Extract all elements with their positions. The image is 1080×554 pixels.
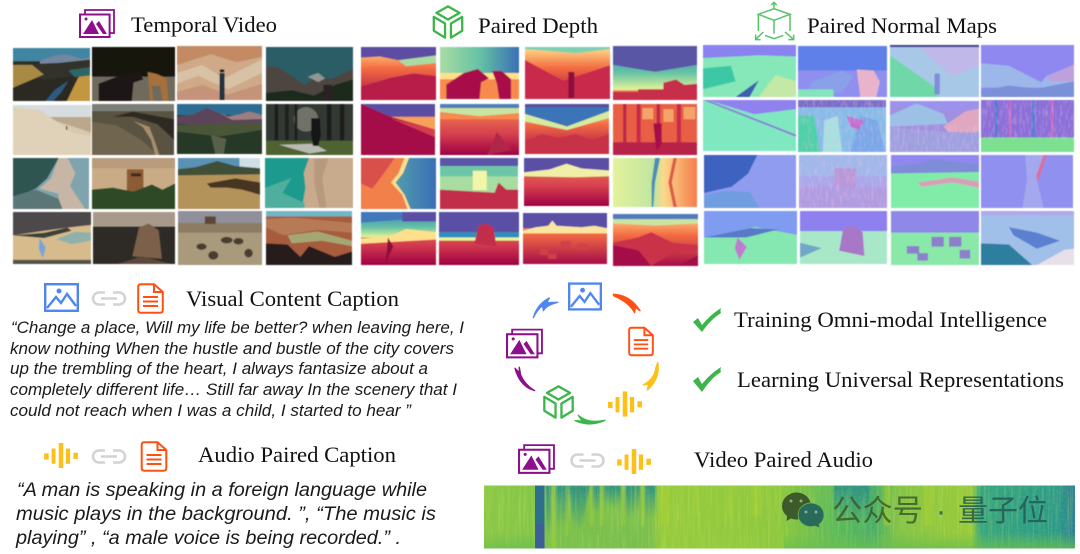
normal 13 (704, 211, 797, 264)
icon: normal cube with arrows (756, 2, 794, 40)
frame: cave temple (91, 157, 176, 210)
normal 3 (889, 44, 980, 98)
title text: Paired Normal Maps (807, 13, 997, 38)
frame: horses (91, 46, 176, 102)
icon: depth cube (544, 386, 573, 418)
label: Training Omni-modal Intelligence (734, 307, 1047, 332)
title text: Visual Content Caption (186, 286, 399, 311)
icon: check (693, 367, 721, 392)
depth 15 (522, 212, 608, 265)
normal 1 (702, 44, 797, 98)
depth 7 (524, 103, 610, 155)
arrow: image to document (613, 294, 640, 313)
depth 11 (523, 157, 610, 207)
normal 16 (981, 211, 1074, 265)
normal 14 (800, 211, 887, 264)
large bubble (782, 493, 811, 521)
icon: audio (608, 391, 642, 417)
frame: desert plain (177, 157, 261, 210)
benefit: learning (693, 367, 1064, 392)
panel: paired normal maps (703, 45, 1074, 265)
watermark text: left: 公众号 (832, 495, 923, 528)
text block: visual caption: could not reach when I was a child, I started to hear ” (10, 401, 413, 420)
label: Learning Universal Representations (737, 367, 1064, 392)
normal 15 (891, 211, 979, 265)
icon: video frames (80, 10, 114, 37)
arrow: audio to cube (575, 415, 605, 424)
text block: audio caption: playing” , “a male voice is being recorded.” . (15, 528, 401, 549)
frame: oasis with glider (12, 211, 92, 265)
panel: paired depth maps (361, 46, 698, 266)
icon: depth cube (434, 6, 462, 38)
frame: canyon road (91, 103, 175, 156)
normal 2 (797, 45, 888, 98)
watermark (782, 493, 923, 528)
frame: sand dune (12, 104, 92, 156)
frame: aerial shore (12, 157, 90, 210)
frame: ruined tower (92, 211, 176, 265)
text block: visual caption: know nothing When the hustle and bustle of the city covers (10, 339, 454, 358)
icon: image (569, 284, 601, 309)
cycle diagram of modalities (507, 284, 658, 424)
noise texture on busy normal maps (798, 100, 1074, 208)
depth 5 (360, 103, 436, 156)
frame: fort and camels (177, 210, 263, 266)
text block: audio caption: “A man is speaking in a foreign language while (17, 480, 427, 501)
arrow: cube to video (515, 367, 535, 391)
depth 8 (612, 103, 698, 156)
text block: visual caption: “Change a place, Will my life be better? when leaving here, I (11, 318, 464, 337)
icon: audio (44, 443, 78, 468)
title text: Video Paired Audio (694, 447, 873, 472)
arrow: image to video (533, 298, 558, 318)
frame: alpine forest (176, 103, 263, 155)
text block: visual caption: up the trembling of the heart, I always fantasize about a (10, 359, 428, 378)
text block: audio caption: music plays in the background. ”, “The music is (16, 504, 437, 525)
normal 11 (891, 155, 979, 208)
depth 10 (439, 157, 519, 210)
depth 13 (360, 211, 437, 266)
frame: valley river (12, 47, 91, 102)
normal 8 (980, 99, 1075, 153)
normal 10 (799, 155, 887, 208)
heading: Video Paired Audio (519, 445, 873, 474)
icon: image (45, 284, 78, 311)
depth 12 (612, 157, 698, 208)
heading: Temporal Video (80, 10, 277, 37)
normal 5 (702, 99, 797, 152)
cycle arrows (515, 294, 658, 424)
watermark text: right: · (936, 495, 946, 528)
depth 9 (360, 157, 437, 210)
normal 9 (704, 155, 796, 208)
normal 6 (797, 99, 887, 153)
title text: Paired Depth (478, 13, 598, 38)
title text: Temporal Video (131, 12, 277, 37)
title text: Audio Paired Caption (198, 442, 396, 467)
frame: forest hiker (265, 103, 354, 156)
frame: mountain rider (265, 46, 354, 102)
depth 16 (612, 213, 699, 267)
icon: audio (617, 449, 651, 474)
depth 2 (439, 46, 520, 100)
small bubble (798, 503, 824, 528)
icon: chat bubbles (782, 493, 824, 528)
depth 14 (438, 211, 520, 266)
heading: Visual Content Caption (45, 284, 399, 313)
watermark text: right: 量子位 (958, 495, 1048, 528)
depth 4 (612, 45, 698, 101)
depth 6 (439, 103, 520, 156)
heading: Paired Depth (434, 6, 598, 38)
panel: temporal video frames (13, 46, 353, 265)
arrow: document to audio (643, 363, 658, 390)
icon: document (629, 328, 653, 355)
heading: Paired Normal Maps (756, 2, 997, 40)
heading: Audio Paired Caption (44, 442, 396, 471)
icon: video (519, 445, 554, 473)
text block: visual caption: completely different life… Still far away In the scenery that I (10, 380, 457, 399)
icon: link (93, 450, 125, 462)
frame: person on rock (176, 45, 263, 101)
icon: video (507, 330, 542, 357)
icon: document (138, 284, 163, 313)
normal 4 (980, 44, 1075, 98)
icon: link (572, 454, 604, 466)
benefit: training (693, 307, 1047, 332)
depth 1 (360, 46, 437, 101)
normal 7 (889, 100, 980, 152)
frame: teal coast (264, 157, 354, 209)
icon: link (93, 292, 125, 304)
depth 3 (524, 46, 611, 100)
normal 12 (981, 155, 1073, 208)
icon: document (142, 442, 166, 471)
icon: check (693, 308, 721, 332)
frame: rainbow mountains (265, 210, 353, 266)
spectrogram (484, 486, 1075, 548)
